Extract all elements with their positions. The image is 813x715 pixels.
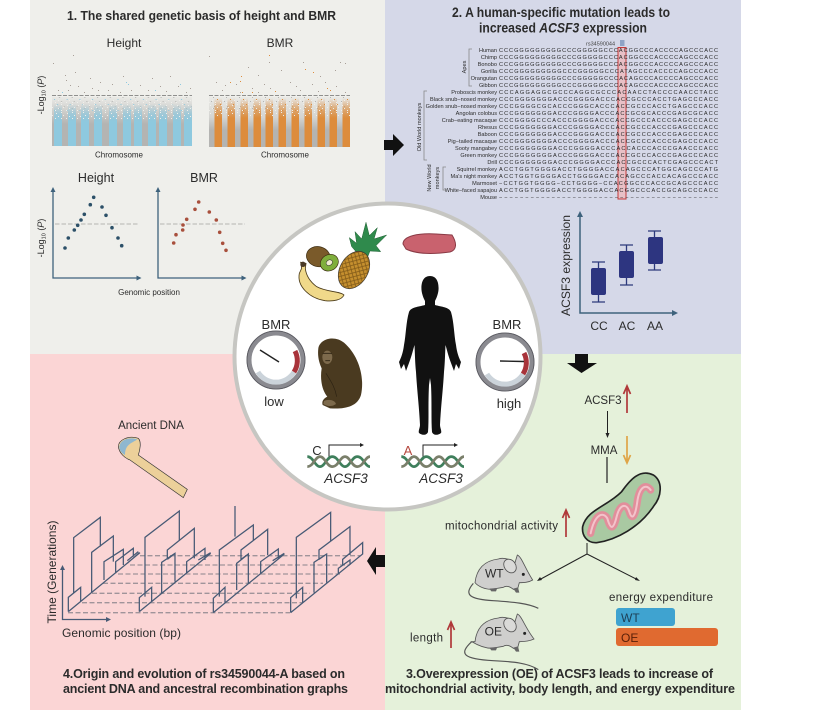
icon: high gauge bbox=[476, 333, 534, 391]
axis label: -Log10(P) Manhattan: -Log bbox=[36, 96, 46, 114]
label: ACSF3 right: ACSF3 bbox=[418, 471, 463, 486]
pathway: ACSF3 to mitochondria bbox=[410, 386, 718, 670]
label: BMR Manhattan: BMR bbox=[267, 36, 294, 50]
label: Chromosome left: Chromosome bbox=[95, 150, 144, 160]
species names and sequences: Human bbox=[479, 48, 497, 54]
species names and sequences: Gibbon bbox=[479, 83, 497, 89]
species names and sequences: Black snub−nosed monkey bbox=[430, 97, 497, 103]
species names and sequences: CCCGGGGGGGACCCGGGGACCCACCGCCCACCCGAGCCCACC bbox=[499, 139, 718, 145]
species names and sequences: Angolan colobus bbox=[456, 111, 497, 117]
label: Chromosome right: Chromosome bbox=[261, 150, 310, 160]
arrow: promoter A bbox=[423, 443, 458, 460]
species names and sequences: Gorilla bbox=[481, 69, 498, 75]
species names and sequences: ACCTGGTGGGGACCTGGGGACCACAGCCCATGGCAGCCCATG bbox=[499, 167, 718, 173]
label: allele C: C bbox=[312, 443, 322, 458]
label: Genomic position: Genomic position bbox=[118, 288, 180, 297]
panel: 1 shared genetic basis bbox=[30, 0, 385, 354]
illustration: OE mouse bbox=[465, 614, 538, 670]
label: rs34590044: rs34590044 bbox=[586, 42, 615, 48]
illustration: WT mouse: WT bbox=[485, 566, 504, 580]
species names and sequences: Bonobo bbox=[478, 62, 497, 68]
panel: 3 overexpression bbox=[385, 354, 741, 710]
chart: ACSF3 expression box plot: AC bbox=[619, 319, 636, 333]
arrows: branch bbox=[537, 543, 640, 581]
label: ACSF3: ACSF3 bbox=[584, 395, 622, 407]
species names and sequences: CCCGGGGGGGACCCGGGGACCCACCACCCACCCGAACCCACC bbox=[499, 146, 718, 152]
species names and sequences: CCCGGGGGGGGGCCCGGGGGCCCACAGCCCACCCCAGCCCACC bbox=[499, 83, 718, 89]
label: low: low bbox=[264, 394, 284, 409]
chart: ACSF3 expression box plot bbox=[559, 211, 678, 333]
species names and sequences: Marmoset bbox=[472, 181, 497, 187]
label: length: length bbox=[410, 632, 443, 644]
label: BMR high: BMR bbox=[493, 317, 521, 332]
illustration: mitochondrion bbox=[583, 473, 660, 543]
species names and sequences: Baboon bbox=[478, 132, 497, 138]
heading: panel 4: 4.Origin and evolution of rs34590044-A based on bbox=[63, 667, 345, 681]
heading: panel 1: 1. The shared genetic basis of height and BMR bbox=[67, 8, 337, 23]
bar: WT energy bbox=[616, 608, 675, 626]
graph: tree 2 bbox=[139, 511, 211, 612]
chart: sequence alignment bbox=[417, 40, 719, 201]
axis label: -Log10(P) locus: -Log bbox=[36, 239, 46, 257]
chart: ACSF3 expression box plot: CC bbox=[590, 319, 608, 333]
arrow: panel 3 to 4 bbox=[367, 547, 385, 575]
arrow: ACSF3 up bbox=[624, 386, 630, 413]
species names and sequences: ACCTGGTGGGGACCTGGGGACCACGGCCCACCGCAGCCCACC bbox=[499, 188, 718, 194]
species names and sequences: CCCGGGGGGGGGCCCGGGGGCCCACGGCCCACCCCAGCCCACC bbox=[499, 48, 718, 54]
species names and sequences: Mouse bbox=[480, 195, 497, 201]
arrow: length up bbox=[448, 622, 454, 648]
species names and sequences: −CCTGGTGGGG−CCTGGGG−CCACGGCCCACCGCAGCCCACC bbox=[499, 181, 718, 187]
arrow: panel 2 to 3 bbox=[567, 354, 597, 373]
species names and sequences: Chimp bbox=[481, 55, 497, 61]
bracket: New World monkeys: monkeys bbox=[435, 167, 441, 189]
bracket: Apes: Apes bbox=[462, 60, 468, 73]
species names and sequences: CCCGGGGGGGACCCGGGGACCCACCGCCCACCTGAGCCCACC bbox=[499, 97, 718, 103]
label: MMA: MMA bbox=[591, 445, 618, 457]
chart: ancestral recombination graphs bbox=[60, 506, 363, 622]
bracket: Old World monkeys: Old World monkeys bbox=[417, 102, 423, 151]
chart: ACSF3 expression box plot: ACSF3 expression bbox=[559, 215, 573, 316]
axis label: Time (Generations): Time (Generations) bbox=[45, 521, 59, 623]
species names and sequences: Sooty mangabey bbox=[455, 146, 497, 152]
icon: DNA left bbox=[307, 457, 370, 467]
species names and sequences: Ma's night monkey bbox=[451, 174, 497, 180]
panel: 2 human-specific mutation bbox=[385, 0, 741, 354]
bracket: New World monkeys: New World bbox=[427, 164, 433, 192]
species names and sequences: Golden snub−nosed monkey bbox=[426, 104, 497, 110]
axes bbox=[60, 565, 111, 622]
label: Ancient DNA: Ancient DNA bbox=[118, 420, 184, 432]
species names and sequences: CCCGGGGGGGGGCCCGGGGGCCCACGGCCCACCCCAGCCCACC bbox=[499, 62, 718, 68]
species names and sequences: Drill bbox=[487, 160, 497, 166]
chart: ACSF3 expression box plot: AA bbox=[647, 319, 663, 333]
illustration: OE mouse: OE bbox=[485, 625, 502, 639]
species names and sequences: CCCGGGGGGGGGCCCGGGGGCCCACAGCCCACCCCAGCCCACC bbox=[499, 76, 718, 82]
illustration: fruits bbox=[299, 222, 387, 301]
species names and sequences: CCCGGGGCGCACCCGGGCACCCACCGCCCACCTGAGCCCACC bbox=[499, 104, 718, 110]
species names and sequences: CCCGGGGGGGACCCGGGGACCCACCGCCCACTCGAGCCCACT bbox=[499, 160, 719, 166]
chart: BMR locus scatter bbox=[156, 187, 246, 280]
species names and sequences: CCCAGGAGGCGCCCAGGCGCCCACAACCTACCCCAACCTACC bbox=[499, 90, 718, 96]
species names and sequences: Orangutan bbox=[471, 76, 497, 82]
arrow: ACSF3 to MMA bbox=[606, 411, 610, 438]
arrow: promoter C bbox=[329, 443, 364, 460]
arrow: MMA to mitochondrion bbox=[606, 457, 608, 483]
label: energy expenditure: energy expenditure bbox=[609, 592, 713, 604]
label: mitochondrial activity: mitochondrial activity bbox=[445, 520, 558, 532]
heading: panel 4 second line: ancient DNA and ancestral recombination graphs bbox=[63, 682, 348, 696]
illustration: ancient bone bbox=[118, 437, 187, 498]
icon: low gauge bbox=[247, 331, 305, 389]
bracket: Apes bbox=[462, 49, 472, 86]
label: Height locus: Height bbox=[78, 171, 115, 185]
axis label: -Log10(P) locus: 10 bbox=[42, 233, 48, 239]
illustration: WT mouse bbox=[469, 555, 538, 608]
species names and sequences: CCCGGGGGGGGGCCCGGGGGCCCATAGCCCACCCCAGCCCACC bbox=[499, 69, 718, 75]
heading: panel 2 line 2: increased ACSF3 expression bbox=[479, 20, 647, 36]
chart: height Manhattan plot bbox=[52, 55, 192, 146]
heading: panel 3 second line: mitochondrial activity, body length, and energy expenditure bbox=[385, 682, 735, 696]
illustration: human silhouette bbox=[399, 276, 461, 435]
axis label: -Log10(P) locus: (P) bbox=[36, 219, 46, 231]
label: ACSF3 left: ACSF3 bbox=[323, 471, 368, 486]
species names and sequences: White−faced sapajou bbox=[445, 188, 497, 194]
species names and sequences: Rhesus bbox=[478, 125, 497, 131]
species names and sequences: Crab−eating macaque bbox=[442, 118, 497, 124]
icon: DNA right bbox=[401, 457, 464, 467]
species names and sequences bbox=[426, 48, 719, 201]
arrow: panel 1 to 2 bbox=[384, 134, 404, 156]
graph: tree 4 bbox=[291, 512, 363, 613]
species names and sequences: CCCGGGGGGGGGCCCGGGGGCCCACGGCCCACCCCAGCCCACC bbox=[499, 55, 718, 61]
illustration: meat bbox=[403, 234, 456, 254]
graph: tree 1 bbox=[68, 517, 140, 612]
heading: panel 3: 3.Overexpression (OE) of ACSF3 leads to increase of bbox=[406, 667, 714, 681]
axis label: -Log10(P) Manhattan: 10 bbox=[42, 90, 48, 96]
bar: OE energy: OE bbox=[621, 631, 638, 645]
central circle bbox=[234, 204, 540, 510]
species names and sequences: CCCGGGGCCCACCCGGGGACCCACCGCCCACCCGAGCCCACC bbox=[499, 118, 718, 124]
arrow: mitochondrial activity up bbox=[562, 510, 570, 537]
label: BMR locus: BMR bbox=[190, 171, 218, 185]
bar: WT energy: WT bbox=[621, 611, 640, 625]
bracket: Old World monkeys bbox=[417, 91, 427, 160]
species names and sequences: Pig−tailed macaque bbox=[448, 139, 497, 145]
label: allele A: A bbox=[404, 443, 413, 458]
highlight: aligned site bbox=[618, 48, 626, 199]
species names and sequences: Proboscis monkey bbox=[451, 90, 497, 96]
bracket: New World monkeys bbox=[427, 164, 446, 192]
axis label: Genomic position (bp): Genomic position (bp) bbox=[62, 626, 181, 640]
graph: tree 3 bbox=[213, 506, 284, 613]
dashed time lines bbox=[68, 556, 360, 613]
axis label: -Log10(P) Manhattan: (P) bbox=[36, 76, 46, 88]
species names and sequences: CCCGGGGGGGACCCGGGGACCCACCGCCCACCCGAGCCCACC bbox=[499, 132, 718, 138]
marker: rs allele bbox=[620, 40, 624, 46]
heading: panel 2 line 1: 2. A human-specific mutation leads to bbox=[452, 5, 670, 20]
chart: BMR Manhattan plot bbox=[209, 55, 350, 147]
species names and sequences: CCCGGGGGGGACCCGGGGACCCACCGCCCACCCGAGCCCACC bbox=[499, 153, 718, 159]
species names and sequences: CCCGGGGGGGACCCGGGGACCCACCGCGCACCCGAGCGCACC bbox=[499, 111, 718, 117]
label: BMR low: BMR bbox=[262, 317, 290, 332]
species names and sequences: ACCTGGTGGGGACCTGGGGACCACAGCCCACCACAGCCCACC bbox=[499, 174, 718, 180]
species names and sequences: Squirrel monkey bbox=[457, 167, 497, 173]
panel: 4 origin and evolution bbox=[30, 354, 385, 710]
bar: OE energy bbox=[616, 628, 718, 646]
arrow: MMA down bbox=[624, 436, 630, 463]
illustration: chimpanzee bbox=[318, 338, 362, 409]
species names and sequences: CCCGGGGGGGACCCGGGGACCCACCGCCCACCCGAGCCCACC bbox=[499, 125, 718, 131]
label: Height Manhattan: Height bbox=[107, 36, 142, 50]
label: high: high bbox=[497, 396, 521, 411]
species names and sequences: Green monkey bbox=[460, 153, 497, 159]
chart: height locus scatter bbox=[50, 187, 142, 280]
species names and sequences: −−−−−−−−−−−−−−−−−−−−−−−−−−−−−−−−−−−−−−−−−− bbox=[499, 195, 718, 201]
